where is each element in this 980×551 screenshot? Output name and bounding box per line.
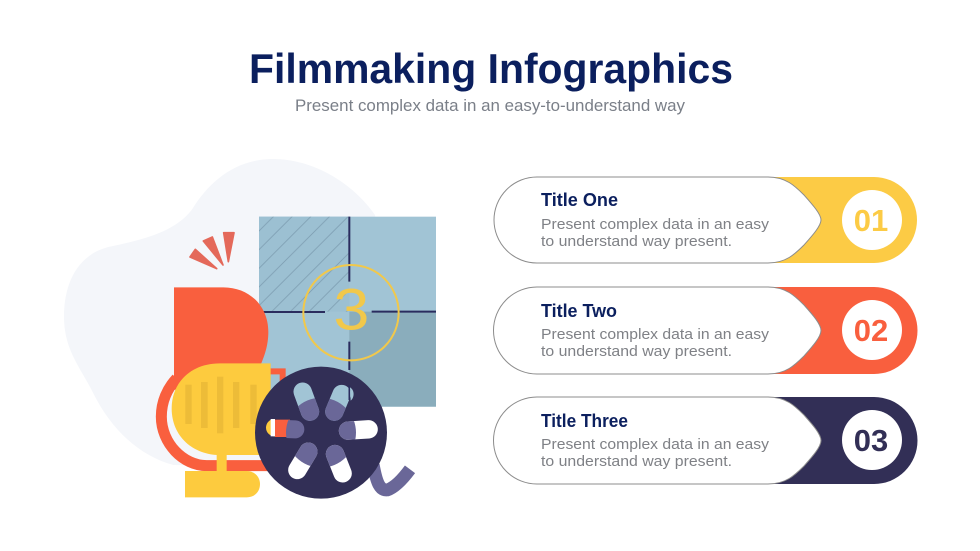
reel hole: left: [266, 419, 295, 436]
subtitle: Present complex data in an easy-to-understand way: [295, 96, 685, 115]
film reel: [255, 367, 387, 499]
white label shape: [494, 177, 821, 263]
number badge: [842, 190, 902, 250]
colored pill: [760, 397, 917, 484]
colored pill: [760, 177, 917, 263]
reel hole: top right: [334, 385, 354, 412]
illustration: filmmaking scene: [64, 159, 436, 499]
microphone stem: [217, 454, 227, 472]
item heading: Title Three: [541, 411, 628, 431]
storyboard panel: [259, 217, 436, 407]
countdown circle with number 3: [303, 265, 399, 360]
number: 01: [854, 203, 888, 238]
number badge: [842, 410, 902, 470]
white label shape: [494, 397, 821, 484]
icon: spark lines: [190, 233, 234, 269]
number: 03: [854, 423, 888, 458]
background blob: [64, 159, 393, 467]
number badge: [842, 300, 902, 360]
film strip tail: [373, 465, 410, 490]
colored pill: [760, 287, 917, 374]
microphone base: [185, 471, 260, 497]
microphone arm: [161, 378, 273, 466]
title: Filmmaking Infographics: [249, 45, 733, 92]
item description: to understand way present.: [541, 234, 732, 250]
white label shape: [494, 287, 821, 374]
countdown circle with number 3: 3: [333, 277, 369, 342]
item description: to understand way present.: [541, 454, 732, 470]
item description: Present complex data in an easy: [541, 217, 770, 233]
item description: to understand way present.: [541, 344, 732, 360]
number: 02: [854, 313, 888, 348]
reel hole: bottom right: [335, 454, 343, 473]
red speaker shape: [174, 287, 268, 390]
panel: item two: [494, 287, 917, 374]
item heading: Title Two: [541, 301, 617, 321]
microphone: [161, 363, 283, 497]
item description: Present complex data in an easy: [541, 437, 770, 453]
microphone head: [172, 363, 271, 455]
item description: Present complex data in an easy: [541, 327, 770, 343]
panel: item three: [494, 397, 917, 484]
panel: item one: [494, 177, 917, 263]
reel hole: bottom left: [297, 452, 308, 470]
reel hole: top left: [303, 392, 310, 412]
microphone grille: [185, 377, 257, 433]
reel hole: right: [348, 429, 369, 431]
item heading: Title One: [541, 190, 618, 210]
